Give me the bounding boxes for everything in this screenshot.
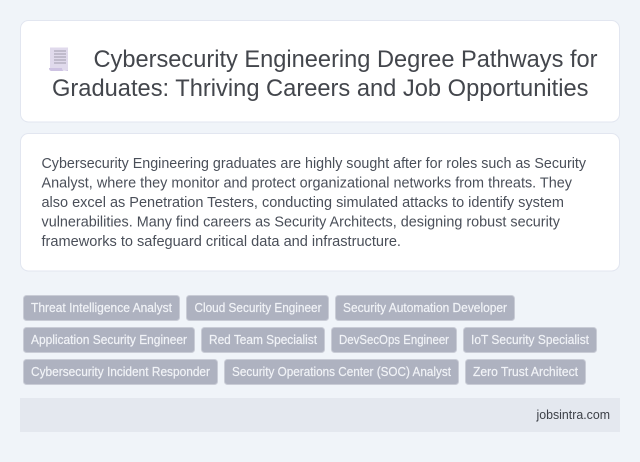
tag: Security Automation Developer: Security Automation Developer xyxy=(343,301,507,315)
tag: Application Security Engineer: Application Security Engineer xyxy=(31,333,187,347)
tag: IoT Security Specialist xyxy=(464,328,596,352)
footer: jobsintra.com xyxy=(536,408,610,422)
tag: Cybersecurity Incident Responder: Cybersecurity Incident Responder xyxy=(31,365,210,379)
tag: Red Team Specialist: Red Team Specialist xyxy=(209,333,317,347)
tag: IoT Security Specialist: IoT Security Specialist xyxy=(471,333,589,347)
text block: description xyxy=(42,156,587,250)
tag: Cybersecurity Incident Responder xyxy=(24,360,218,384)
tag: Application Security Engineer xyxy=(24,328,194,352)
text block: description: frameworks to safeguard critical data and infrastructure. xyxy=(42,234,401,250)
title xyxy=(52,46,598,102)
text block: description: also excel as Penetration Testers, conducting simulated attacks to identify system xyxy=(42,195,564,211)
tag: Security Operations Center (SOC) Analyst xyxy=(224,360,458,384)
footer xyxy=(20,398,620,432)
text block: description: vulnerabilities. Many find careers as Security Architects, designing robust security xyxy=(42,214,561,230)
tag: Cloud Security Engineer: Cloud Security Engineer xyxy=(194,301,322,315)
text block: description: Cybersecurity Engineering graduates are highly sought after for roles such as Security xyxy=(42,156,587,172)
text block: description: Analyst, where they monitor and protect organizational networks from threats. They xyxy=(42,176,573,192)
tag: Threat Intelligence Analyst xyxy=(24,296,180,320)
tag: Security Automation Developer xyxy=(336,296,514,320)
panel: job tags xyxy=(24,296,596,384)
tag: Red Team Specialist xyxy=(202,328,324,352)
tag: DevSecOps Engineer: DevSecOps Engineer xyxy=(339,333,449,347)
tag: Zero Trust Architect xyxy=(466,360,586,384)
icon: document scroll xyxy=(49,48,68,71)
tag: Cloud Security Engineer xyxy=(186,296,328,320)
title: Graduates: Thriving Careers and Job Opportunities xyxy=(52,75,588,102)
tag: Security Operations Center (SOC) Analyst: Security Operations Center (SOC) Analyst xyxy=(232,365,451,379)
title: Cybersecurity Engineering Degree Pathways for xyxy=(94,46,598,73)
tag: Zero Trust Architect: Zero Trust Architect xyxy=(473,365,578,379)
panel: description xyxy=(20,134,620,271)
panel: title card xyxy=(20,20,620,122)
tag: Threat Intelligence Analyst: Threat Intelligence Analyst xyxy=(31,301,172,315)
tag: DevSecOps Engineer xyxy=(332,328,456,352)
